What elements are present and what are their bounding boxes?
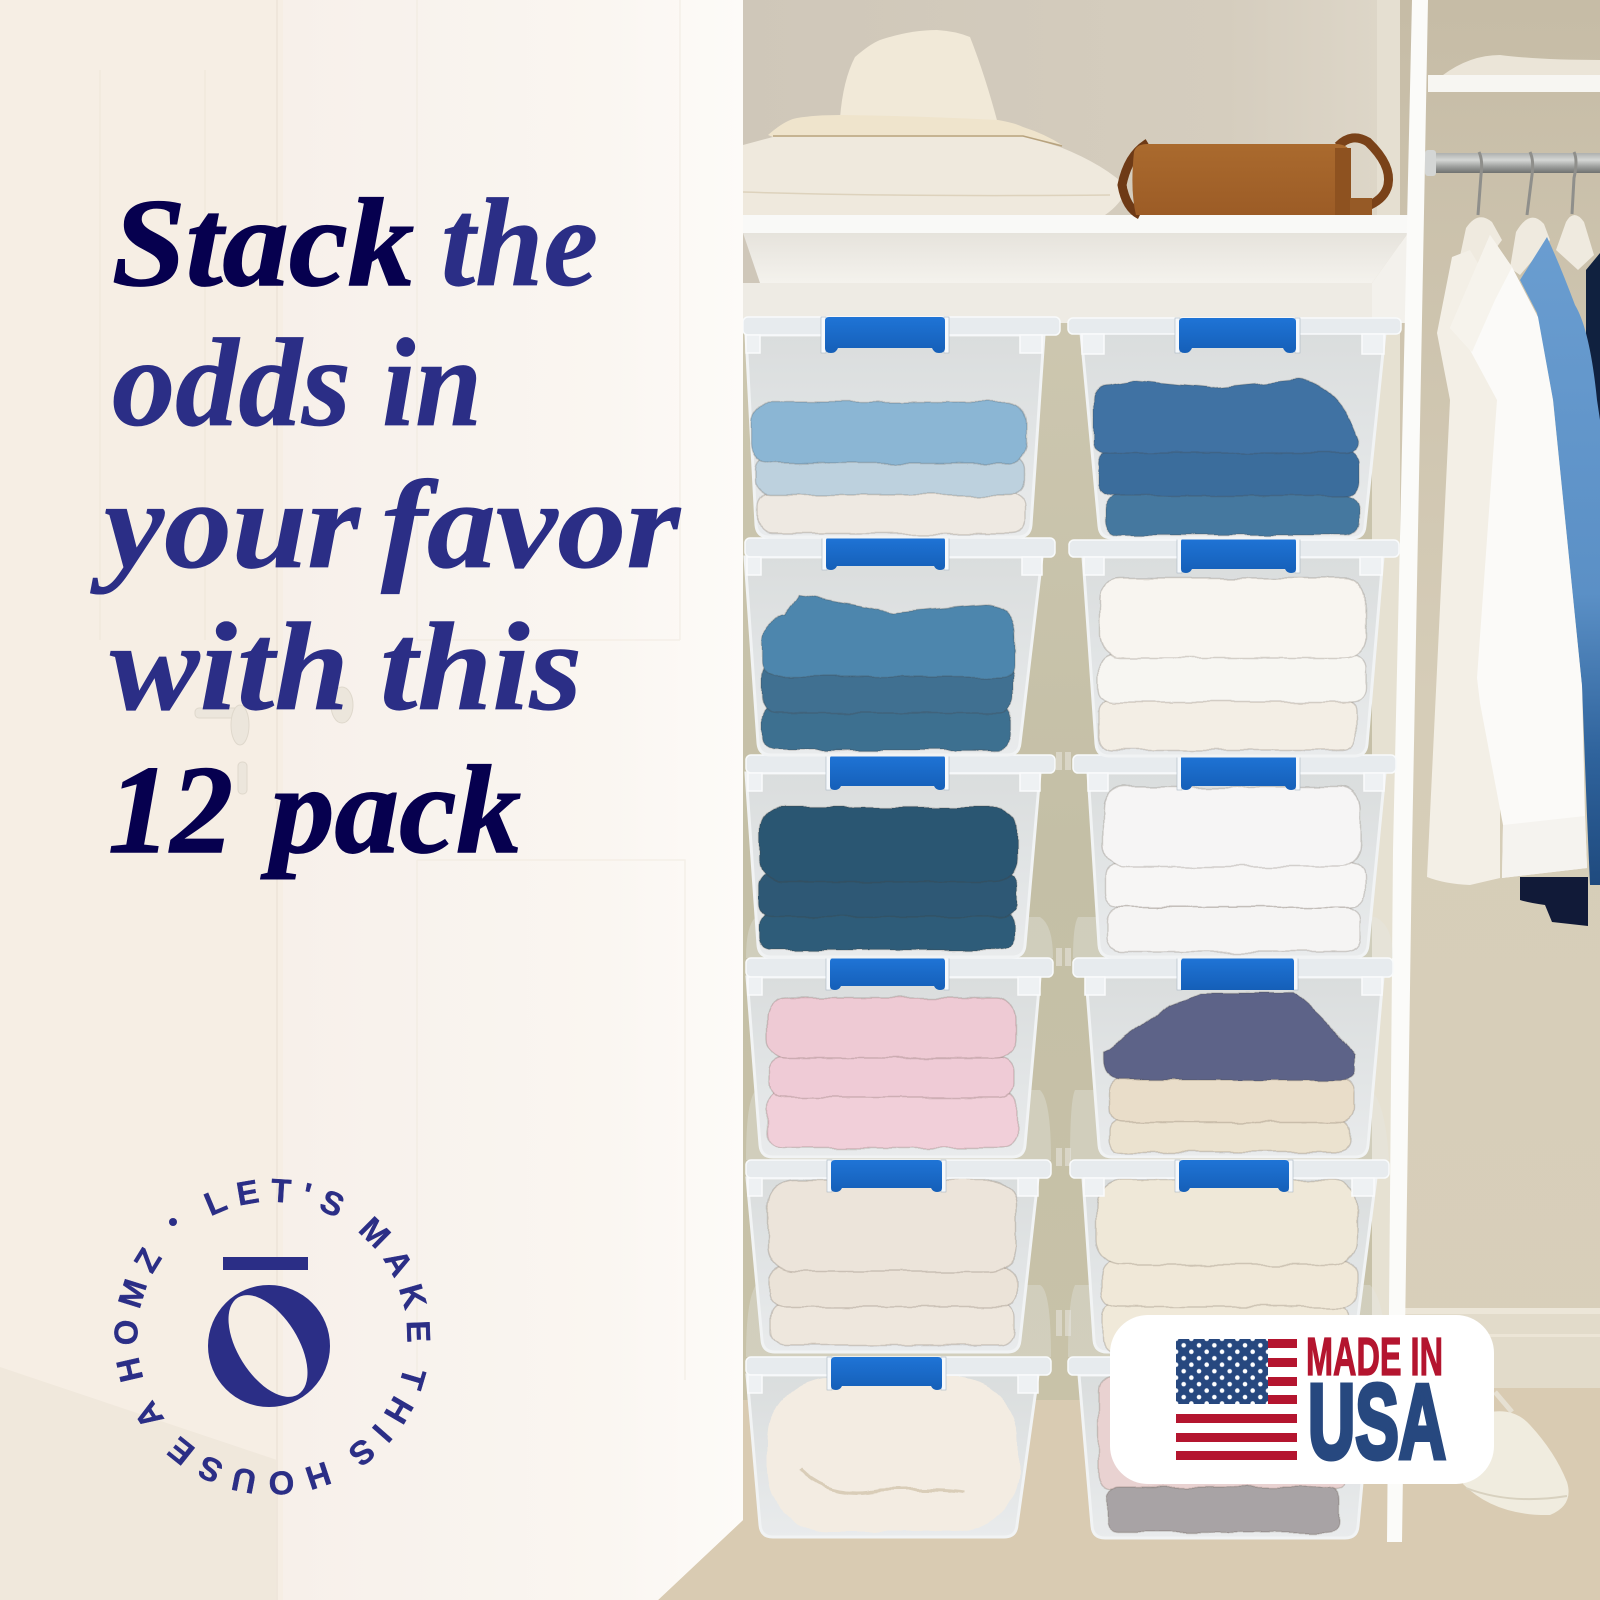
bin 1 right [1068,318,1401,538]
american flag [1176,1339,1297,1460]
dark blue towels [758,807,1016,950]
baseboard [1404,1308,1600,1388]
bin 3 right [1073,755,1396,957]
headline: with [110,598,349,737]
white shirt [1450,235,1587,878]
white towels [1099,578,1366,750]
headline: odds [112,314,351,453]
pink towel [1099,1377,1349,1489]
cabinet right post [1387,0,1428,1542]
right side shelf [1428,55,1600,92]
grey towel [1107,1487,1339,1533]
slipper [1463,1392,1569,1515]
hanging rod [1425,150,1600,176]
door handle [195,687,353,794]
white towels [1103,787,1365,952]
headline: pack [261,741,521,880]
navy garment [1520,253,1600,926]
headline: Stack [112,174,414,313]
blue shirt [1520,237,1600,885]
folded towels [1096,1180,1357,1352]
bin 3 left [746,755,1055,957]
light blue towels [751,402,1027,534]
headline: the [441,174,598,313]
circular slogan: LET'S MAKE THIS HOUSE A HOMZ [114,1178,430,1495]
connectors between bins [1056,752,1071,1336]
headline: in [382,314,482,453]
towels navy and beige [1105,993,1354,1152]
white door [0,0,743,1600]
hangers [1456,152,1594,275]
made in text: MADE IN [1306,1327,1443,1387]
bin 2 right [1069,538,1399,756]
headline: your [90,456,361,595]
bin column right, bottom bin [1068,1285,1386,1538]
bin 4 right [1073,917,1393,1157]
headline: favor [381,456,681,595]
bin 5 right [1070,1090,1389,1352]
bin 4 left [746,917,1053,1157]
logo badge [114,1178,430,1495]
letter o mark [208,1285,330,1407]
bin 5 left [746,1090,1051,1352]
brown bag [1122,138,1389,215]
headline [90,174,681,880]
carpet floor [658,1388,1600,1600]
bin 2 left [745,537,1055,755]
upper shelf with underside [743,215,1411,323]
macron bar [223,1257,308,1270]
made in usa badge [1110,1315,1494,1484]
blue towels [762,595,1014,750]
bin 1 left [743,317,1060,537]
closet back wall [743,0,1433,1543]
hat [743,30,1110,196]
pillow [743,137,1128,215]
right compartment wall [1400,0,1600,1400]
folded towels [768,1180,1016,1345]
rolled blanket [767,1378,1018,1532]
usa text: USA [1308,1363,1446,1481]
headline: this [380,598,582,737]
pink towels [767,998,1016,1148]
mid blue towels [1094,380,1359,535]
bin column left, bottom bin [746,1285,1051,1537]
headline: 12 [108,741,233,880]
bullet dot [169,1218,177,1226]
cream shirt [1427,250,1500,885]
